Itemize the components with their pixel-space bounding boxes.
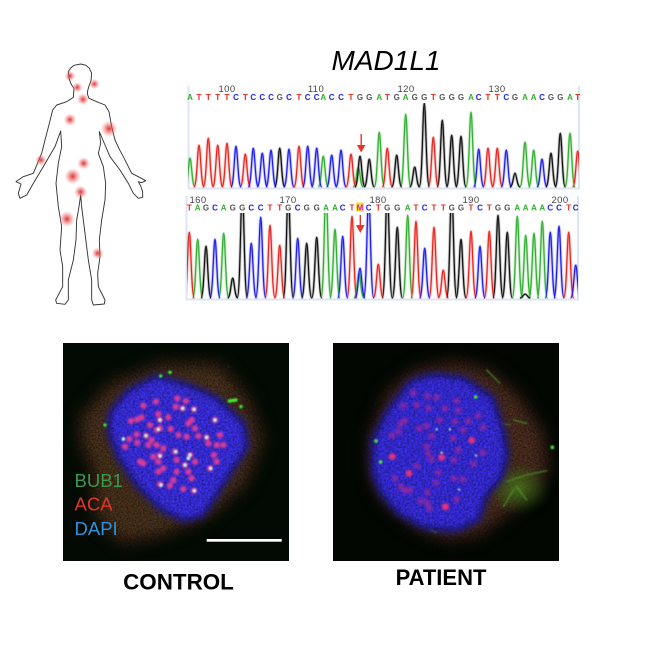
base calls: T [197,93,202,102]
micrograph: control cell [63,343,289,561]
position numbers: 100 [218,84,236,95]
base calls: G [512,93,518,102]
base calls: A [332,204,338,212]
base calls: C [258,204,264,212]
base calls: A [539,204,545,212]
position numbers: 200 [551,195,569,206]
base calls: A [320,93,326,102]
base calls: T [487,204,492,212]
base calls: A [468,93,474,102]
BUB1 bright foci [123,408,215,491]
base calls: G [458,204,464,212]
base calls: T [566,204,571,212]
base calls: T [187,204,192,212]
base calls: C [314,93,320,102]
chromatogram: top trace [185,84,583,188]
base calls: C [503,93,509,102]
base calls: A [323,204,329,212]
base calls: C [422,204,428,212]
position numbers: 120 [397,84,415,95]
base calls: C [268,93,274,102]
base calls: C [259,93,265,102]
base calls: A [567,93,573,102]
base calls: T [225,93,230,102]
base calls: G [495,204,501,212]
position numbers [218,84,506,95]
base calls: G [314,204,320,212]
base calls: G [239,204,245,212]
base calls: T [268,204,273,212]
base calls: C [556,204,562,212]
base calls: C [305,93,311,102]
base calls: G [394,93,400,102]
base calls: C [573,204,579,212]
green speckle and streaks [430,370,547,533]
base calls: A [376,93,382,102]
body figure with lesion spots [16,64,146,305]
base calls: G [357,93,363,102]
base calls: A [531,204,537,212]
title: MAD1L1: MAD1L1 [332,45,440,76]
position numbers [189,195,569,206]
base calls: C [212,204,218,212]
chromatogram: bottom trace [184,188,581,300]
scale bar [207,539,282,542]
base calls: T [469,204,474,212]
base calls: G [421,93,427,102]
base calls: G [230,204,236,212]
base calls: T [297,93,302,102]
base calls: G [366,93,372,102]
base calls: A [187,93,193,102]
base calls: G [412,93,418,102]
base calls: G [384,204,390,212]
base calls: A [514,204,520,212]
centromere spots [125,398,223,491]
base calls: G [203,204,209,212]
bright green foci [376,397,552,462]
base calls: A [405,204,411,212]
base calls: C [248,204,254,212]
highlighted heterozygous base [356,202,364,212]
base calls: C [233,93,239,102]
base calls: C [286,93,292,102]
label: PATIENT: PATIENT [396,565,487,590]
base calls: C [250,93,256,102]
green speckle [88,367,247,525]
base calls: T [206,93,211,102]
base calls: C [295,204,301,212]
position numbers: 180 [369,195,387,206]
label: CONTROL: CONTROL [123,570,234,594]
green cytoplasmic foci [105,372,241,425]
base calls: A [221,204,227,212]
base calls: C [329,93,335,102]
lesion spots [35,71,117,259]
position numbers: 170 [279,195,297,206]
base calls: G [449,204,455,212]
base calls: G [458,93,464,102]
base calls: G [285,204,291,212]
base calls: T [575,93,580,102]
green cytoplasm patch [485,462,552,515]
base calls: T [385,93,390,102]
base calls: G [449,93,455,102]
base calls: C [340,204,346,212]
base calls: T [486,93,491,102]
label: ACA: ACA [74,494,113,514]
base calls: M [357,204,364,212]
base calls: T [431,93,436,102]
base calls: C [366,204,372,212]
base calls: T [441,204,446,212]
base calls: C [539,93,545,102]
panel frame [186,196,578,300]
micrograph: patient cell [333,343,559,561]
base calls: T [376,204,381,212]
base calls: C [338,93,344,102]
base calls: G [439,93,445,102]
body outline [16,64,146,305]
base calls: G [277,93,283,102]
base calls: A [522,93,528,102]
base calls: G [504,204,510,212]
base calls: T [414,204,419,212]
base calls: G [548,93,554,102]
position numbers: 110 [308,84,324,95]
position numbers: 160 [189,195,207,206]
base calls: A [195,204,201,212]
base calls: T [495,93,500,102]
trace peaks [185,103,583,187]
pale foci [437,429,476,490]
panel frame [188,86,579,188]
position numbers: 190 [462,195,480,206]
arrow: variant position, top trace [357,134,366,152]
base calls: T [350,204,355,212]
base calls: A [403,93,409,102]
base calls: G [304,204,310,212]
cytoplasm [370,362,548,540]
base calls: T [349,93,354,102]
label: BUB1: BUB1 [74,470,123,491]
centromere spots [392,393,483,509]
base calls: A [523,204,529,212]
base calls: G [557,93,563,102]
base calls: C [477,204,483,212]
nucleus [108,375,248,522]
base calls: T [277,204,282,212]
base calls: T [432,204,437,212]
base calls: G [394,204,400,212]
nucleus [372,373,508,532]
base calls: C [476,93,482,102]
base calls: C [547,204,553,212]
position numbers: 130 [488,84,506,95]
base calls: T [215,93,220,102]
arrow: variant position, bottom trace [356,215,365,233]
base calls: T [243,93,248,102]
cytoplasm [80,363,263,543]
trace peaks [187,213,578,299]
bright centromere spots [392,440,472,507]
label: DAPI: DAPI [74,518,118,539]
base calls: A [531,93,537,102]
legend: channel labels [74,470,123,539]
